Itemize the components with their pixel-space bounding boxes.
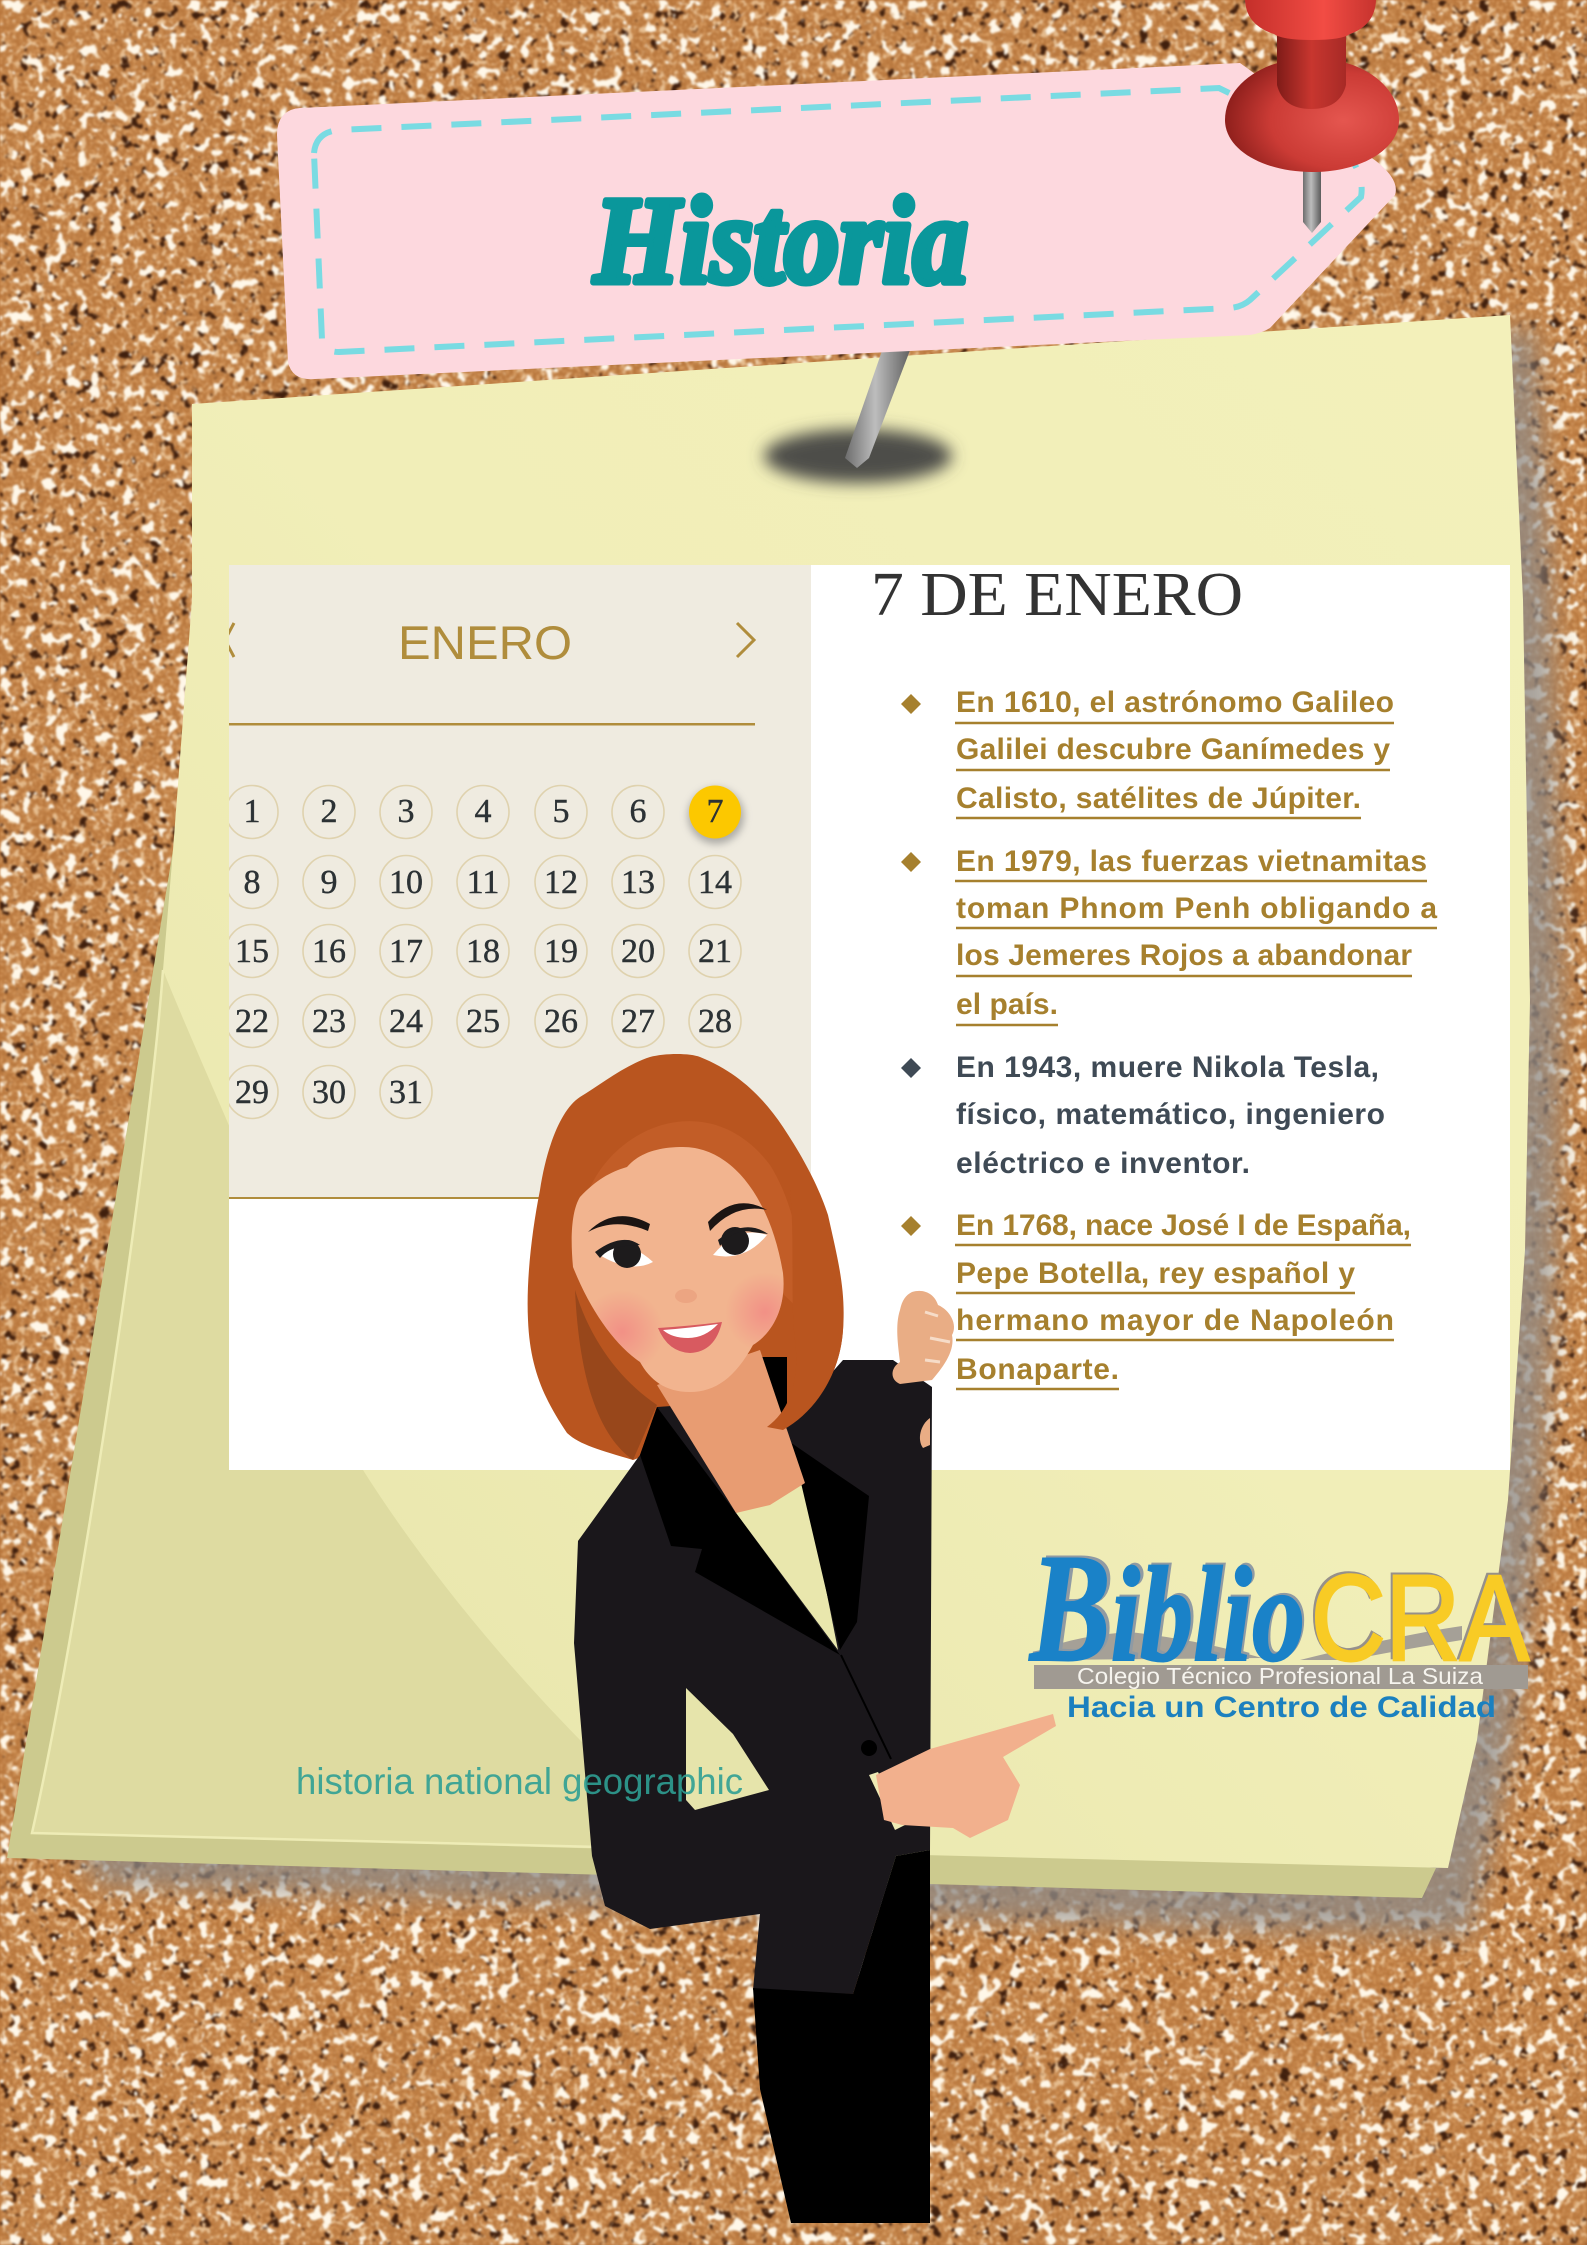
event 1610 — [901, 686, 1394, 818]
calendar days: 13 — [621, 864, 655, 901]
event 1979: los Jemeres Rojos a abandonar — [956, 939, 1412, 972]
arrow: previous month — [229, 622, 236, 658]
jacket button — [861, 1740, 877, 1756]
event 1979: toman Phnom Penh obligando a — [956, 892, 1437, 925]
calendar days: 18 — [466, 933, 500, 970]
hair lower shade — [575, 1290, 657, 1460]
calendar days: 30 — [312, 1074, 346, 1111]
logo Biblio shadow: Biblio — [1032, 1520, 1307, 1692]
logo CRA: CRA — [1311, 1550, 1530, 1686]
blouse — [736, 1483, 838, 1650]
calendar days: 9 — [320, 864, 338, 901]
pointing hand — [876, 1714, 1056, 1838]
logo: BiblioCRA — [1028, 1520, 1530, 1724]
calendar days: 26 — [544, 1003, 578, 1040]
fold highlight — [32, 970, 600, 1847]
shadow of the pin on the note — [764, 429, 952, 483]
hair top light — [585, 1121, 801, 1310]
event 1979: el país. — [956, 988, 1058, 1021]
calendar days: 20 — [621, 933, 655, 970]
curled shaded corner — [32, 970, 720, 1852]
calendar days: 27 — [621, 1003, 655, 1040]
calendar days: 1 — [244, 793, 260, 830]
cheeks — [596, 1281, 784, 1360]
calendar days: 10 — [389, 864, 423, 901]
nose — [675, 1289, 697, 1303]
logo school name: Colegio Técnico Profesional La Suiza — [1077, 1663, 1483, 1689]
calendar days: 3 — [398, 793, 414, 830]
note drop shadow — [70, 330, 1562, 1935]
pin neck — [1277, 30, 1346, 109]
event 1768 — [901, 1209, 1411, 1389]
calendar days: 14 — [698, 864, 732, 901]
event list — [901, 686, 1437, 1389]
calendar days: 16 — [312, 933, 346, 970]
mouth — [658, 1322, 722, 1353]
logo slogan: Hacia un Centro de Calidad — [1067, 1691, 1496, 1724]
event 1943: eléctrico e inventor. — [956, 1147, 1250, 1180]
arrow: next month — [737, 623, 754, 657]
left lapel — [640, 1407, 840, 1655]
event 1610: Galilei descubre Ganímedes y — [956, 733, 1390, 766]
calendar month: ENERO — [398, 616, 572, 669]
calendar days: 22 — [235, 1003, 269, 1040]
icon: red push pin — [1225, 0, 1399, 233]
calendar days: 4 — [474, 793, 492, 830]
calendar days: 12 — [544, 864, 578, 901]
panel: sticky note — [7, 315, 1530, 1898]
panel: white content card — [229, 565, 1510, 1470]
left eyebrow — [588, 1216, 650, 1232]
right eye — [713, 1227, 768, 1256]
calendar days: 19 — [544, 933, 578, 970]
front hair lock — [767, 1190, 843, 1430]
event 1943 — [901, 1051, 1385, 1180]
pin shaft stuck in the note — [845, 345, 912, 468]
right lapel — [760, 1357, 869, 1650]
calendar days: 2 — [320, 793, 338, 830]
neck — [657, 1350, 805, 1513]
logo swoosh — [1040, 1626, 1462, 1660]
calendar days: 11 — [467, 864, 499, 901]
illustration: woman pointing — [528, 1054, 1056, 2223]
left eye — [595, 1240, 653, 1268]
calendar days: 31 — [389, 1074, 423, 1111]
back hair — [528, 1054, 844, 1460]
event 1768: En 1768, nace José I de España, — [956, 1209, 1411, 1242]
cuff — [869, 1772, 905, 1830]
title: Historia — [593, 172, 968, 309]
calendar days: 28 — [698, 1003, 732, 1040]
panel: pink title tag — [277, 63, 1396, 379]
event 1979 — [901, 845, 1437, 1025]
back sheet of the note — [7, 850, 1436, 1898]
event 1768: Bonaparte. — [956, 1353, 1119, 1386]
pin body — [1225, 58, 1399, 172]
calendar days: 24 — [389, 1003, 423, 1040]
event 1979: En 1979, las fuerzas vietnamitas — [956, 845, 1427, 878]
jacket — [574, 1360, 932, 1994]
dashed stitching — [314, 88, 1362, 352]
panel: calendar — [225, 565, 811, 1199]
calendar days: 7 — [706, 793, 724, 830]
calendar days: 17 — [389, 933, 423, 970]
calendar days: 29 — [235, 1074, 269, 1111]
calendar days: 8 — [244, 864, 260, 901]
calendar days: 21 — [698, 933, 732, 970]
event 1768: Pepe Botella, rey español y — [956, 1257, 1355, 1290]
trousers — [753, 1850, 930, 2223]
event 1943: físico, matemático, ingeniero — [956, 1098, 1385, 1131]
hole between arm and torso — [686, 1688, 769, 1810]
heading: date: 7 DE ENERO — [871, 561, 1243, 629]
logo CRA shadow: CRA — [1309, 1548, 1528, 1684]
event 1768: hermano mayor de Napoleón — [956, 1304, 1394, 1337]
logo grey band — [1034, 1665, 1528, 1689]
event 1610: Calisto, satélites de Júpiter. — [956, 782, 1361, 815]
pin needle — [1303, 165, 1321, 233]
right eyebrow — [708, 1203, 767, 1231]
divider — [229, 723, 755, 726]
logo Biblio: Biblio — [1028, 1522, 1305, 1694]
calendar days: 5 — [552, 793, 570, 830]
event 1610: En 1610, el astrónomo Galileo — [956, 686, 1394, 719]
face — [572, 1147, 784, 1392]
calendar days — [226, 786, 744, 1118]
event 1943: En 1943, muere Nikola Tesla, — [956, 1051, 1379, 1084]
pin cap — [1245, 0, 1376, 40]
caption: search term: historia national geographic — [296, 1761, 743, 1802]
gripping fingers — [892, 1291, 954, 1448]
calendar days: 23 — [312, 1003, 346, 1040]
calendar days: 25 — [466, 1003, 500, 1040]
front sheet of the note — [32, 315, 1530, 1868]
calendar days: 15 — [235, 933, 269, 970]
calendar days: 6 — [630, 793, 646, 830]
